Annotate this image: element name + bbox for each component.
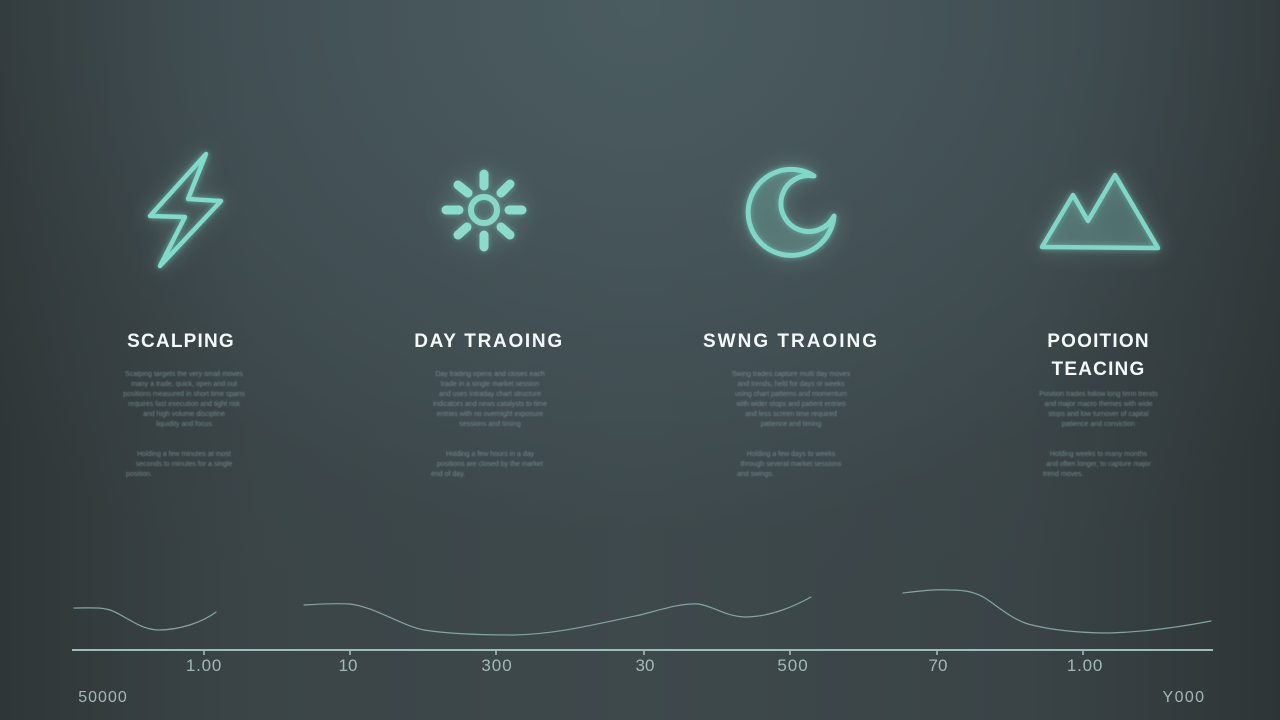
- heading: position trading: [1047, 331, 1150, 380]
- text block: position trading description: trend moves.: [1043, 471, 1083, 478]
- heading: position trading: TEACING: [1052, 359, 1145, 380]
- text block: day trading description: entries with no overnight exposure: [437, 411, 543, 418]
- axis label: 100: 1.00: [186, 656, 222, 675]
- text block: day trading description: positions are closed by the market: [437, 461, 543, 468]
- text block: scalping description: Scalping targets the very small moves: [125, 371, 243, 378]
- text block: position trading description: and often longer, to capture major: [1046, 461, 1151, 468]
- text block: scalping description: liquidity and focus: [156, 421, 212, 428]
- text block: swing trading description: through several market sessions: [741, 461, 841, 468]
- text block: day trading description: trade in a single market session: [441, 381, 539, 388]
- text block: swing trading description: and trends, held for days or weeks: [737, 381, 844, 388]
- text block: day trading description: [430, 370, 547, 478]
- text block: swing trading description: using chart patterns and momentum: [735, 391, 847, 398]
- text block: scalping description: positions measured in short time spans: [123, 391, 245, 398]
- axis start label: 50000: [78, 689, 128, 706]
- axis label: 300: 300: [481, 656, 513, 675]
- text block: position trading description: [1039, 390, 1158, 478]
- text block: day trading description: Day trading opens and closes each: [435, 371, 545, 378]
- text block: position trading description: patience and conviction: [1062, 421, 1135, 428]
- text block: day trading description: Holding a few hours in a day: [446, 451, 534, 458]
- text block: swing trading description: [732, 370, 850, 478]
- text block: day trading description: end of day.: [431, 471, 465, 478]
- text block: position trading description: Holding weeks to many months: [1050, 451, 1147, 458]
- text block: swing trading description: patience and timing: [761, 421, 821, 428]
- text block: day trading description: sessions and timing: [459, 421, 521, 428]
- heading: scalping: SCALPING: [127, 331, 235, 352]
- axis label: 30: 30: [636, 656, 654, 675]
- text block: scalping description: requires fast execution and tight risk: [128, 401, 240, 408]
- text block: scalping description: position.: [126, 471, 152, 478]
- axis label: 500: 500: [777, 656, 809, 675]
- axis end label: Y000: [1163, 689, 1205, 706]
- text block: swing trading description: Swing trades capture multi day moves: [732, 371, 850, 378]
- text block: swing trading description: and swings.: [737, 471, 774, 478]
- text block: scalping description: [123, 370, 245, 478]
- text block: scalping description: seconds to minutes for a single: [136, 461, 232, 468]
- text block: day trading description: indicators and news catalysts to time: [433, 401, 547, 408]
- text block: swing trading description: and less screen time required: [745, 411, 837, 418]
- heading: day trading: DAY TRAOING: [414, 331, 564, 352]
- text block: swing trading description: Holding a few days to weeks: [747, 451, 835, 458]
- heading: swing trading: SWNG TRAOING: [703, 331, 879, 352]
- text block: day trading description: and uses intraday chart structure: [439, 391, 541, 398]
- text block: position trading description: stops and low turnover of capital: [1048, 411, 1149, 418]
- text block: scalping description: and high volume discipline: [143, 411, 225, 418]
- text block: scalping description: Holding a few minutes at most: [137, 451, 231, 458]
- axis label: 10: 10: [339, 656, 357, 675]
- price curve: [74, 590, 1211, 635]
- text block: swing trading description: with wider stops and patient entries: [736, 401, 846, 408]
- axis line and ticks: [72, 650, 1213, 655]
- text block: position trading description: Position trades follow long term trends: [1039, 391, 1158, 398]
- axis label: 1.00: 1.00: [1067, 656, 1103, 675]
- text block: position trading description: and major macro themes with wide: [1044, 401, 1153, 408]
- heading: position trading: POOITION: [1047, 331, 1150, 352]
- axis label: 70: 70: [929, 656, 947, 675]
- text block: scalping description: many a trade, quick, open and out: [131, 381, 237, 388]
